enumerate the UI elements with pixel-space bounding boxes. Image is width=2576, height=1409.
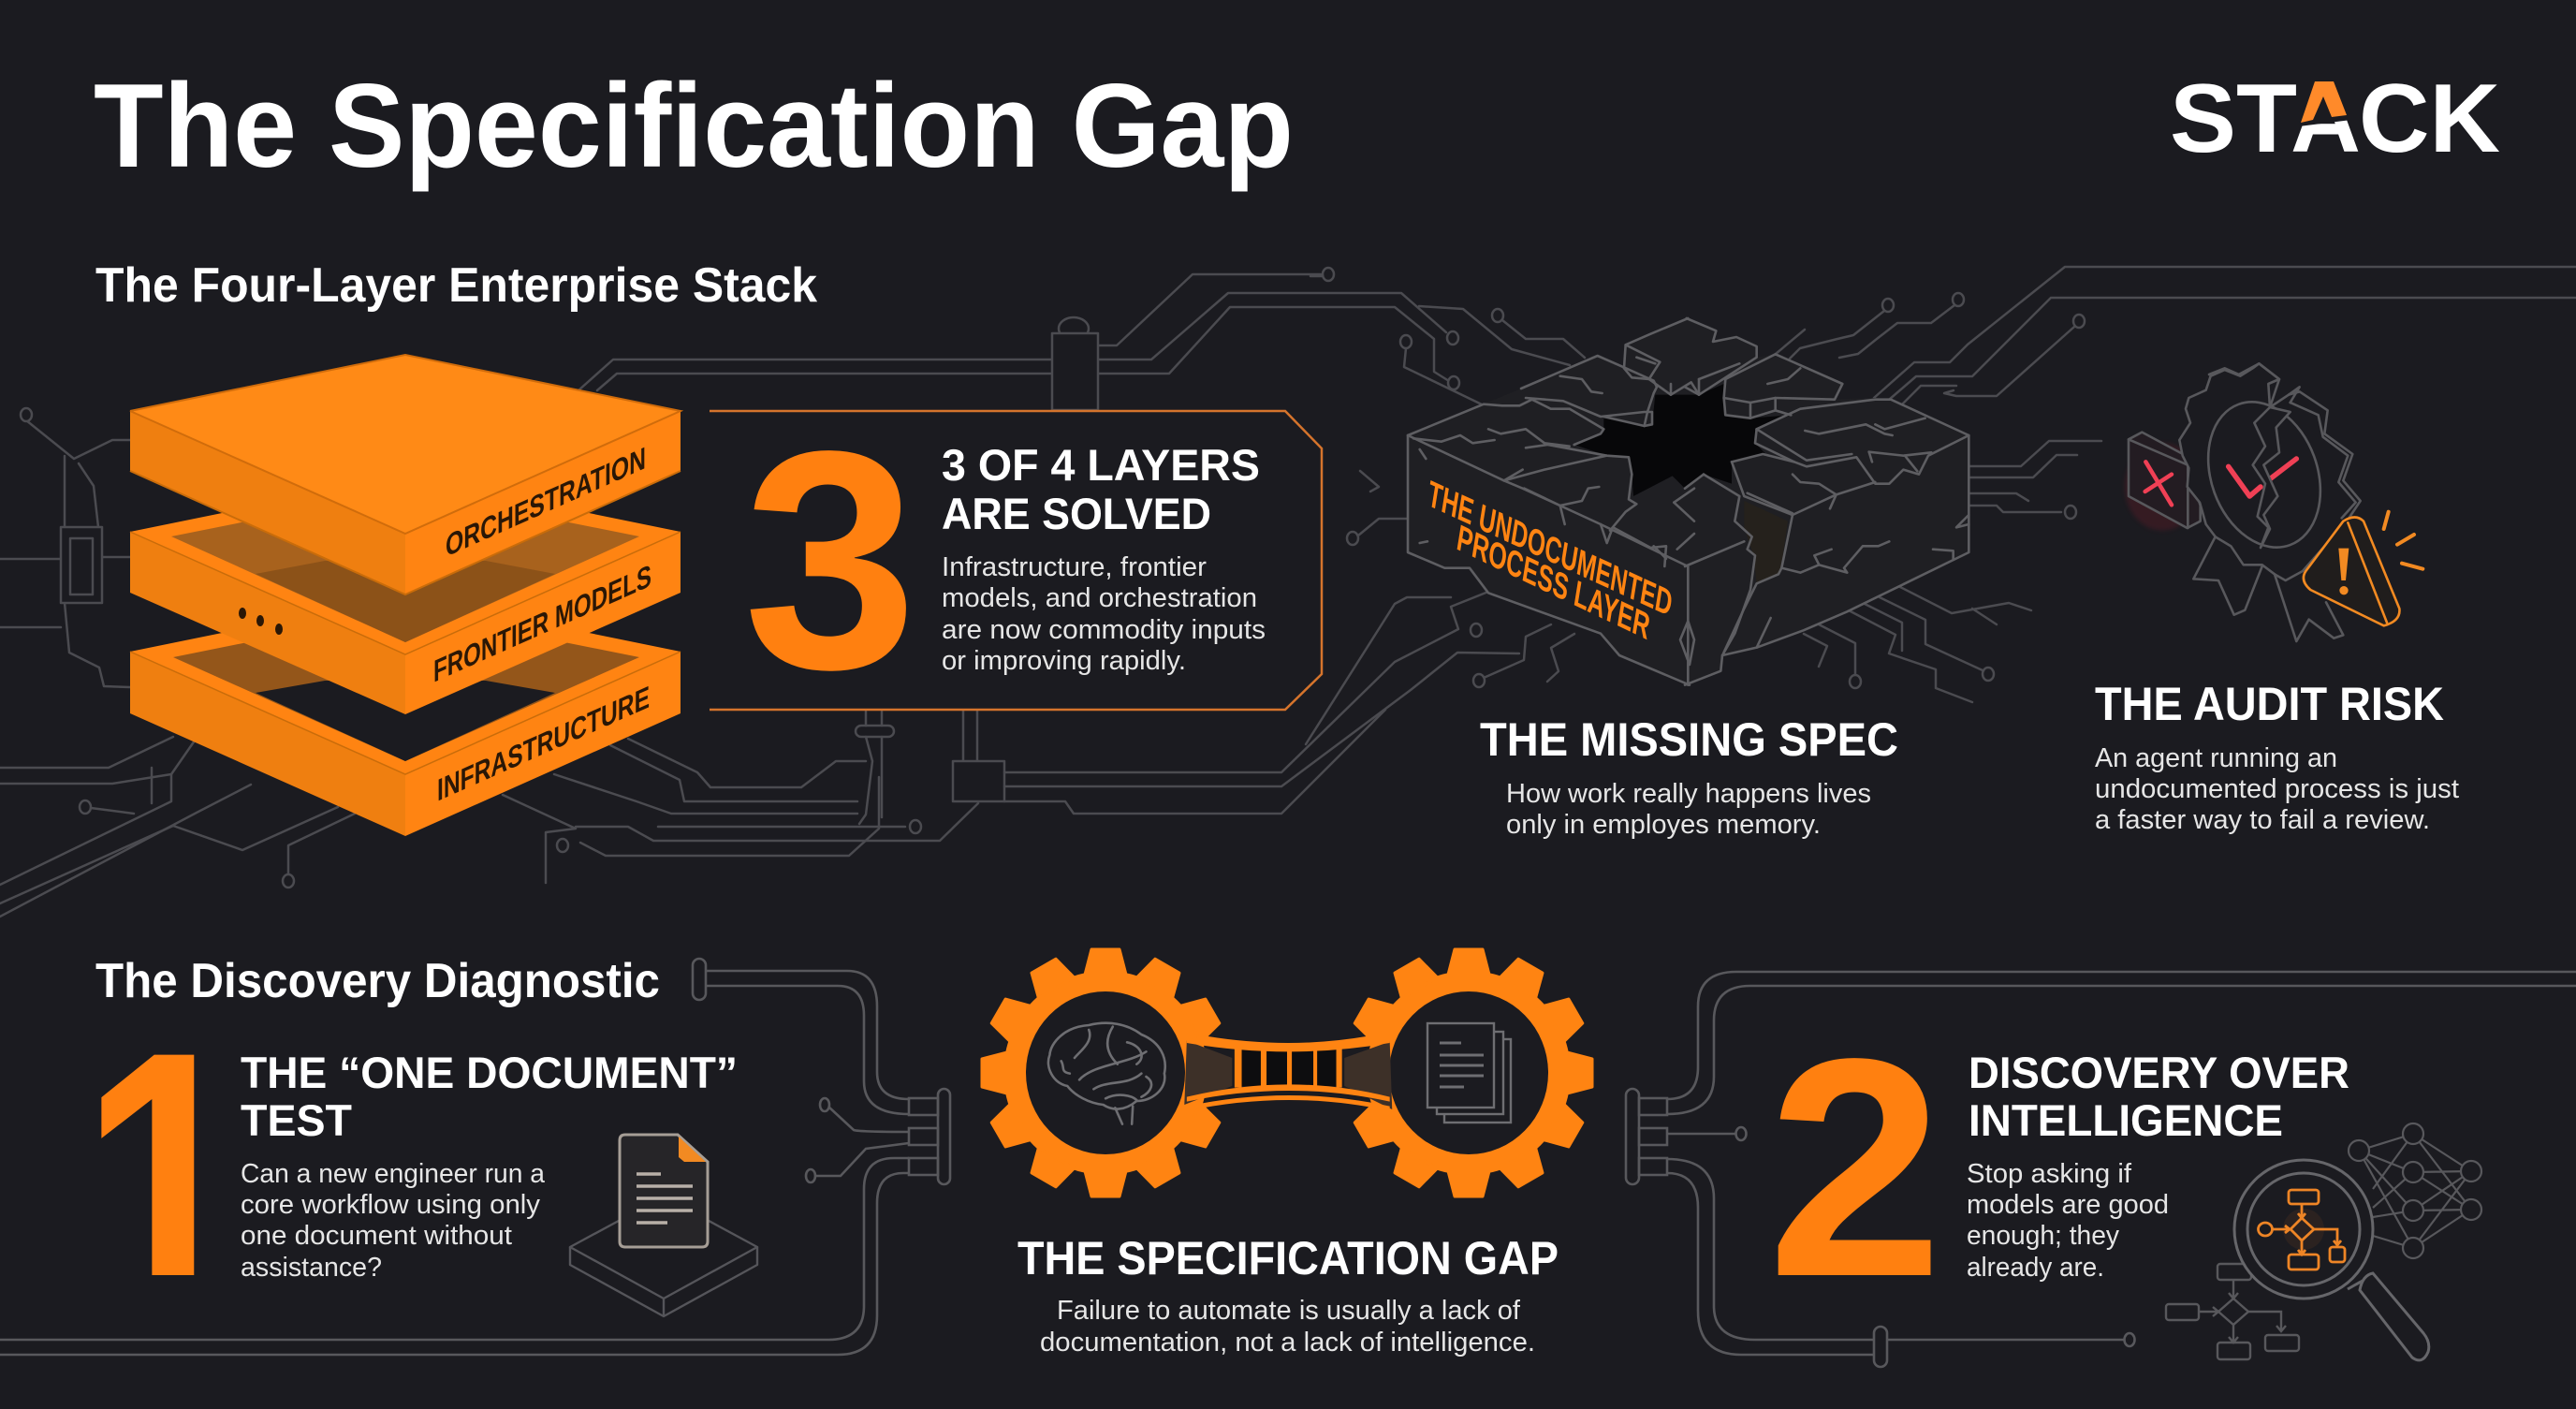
text: the audit risk [2095,678,2459,835]
big number 1: 1 [80,973,251,1398]
text: discovery over intelligence: already are. [1967,1253,2104,1283]
magnifier [2234,1160,2429,1360]
right front chunk [1732,454,1794,462]
text: the missing spec [1480,713,1898,840]
cube face label: PROCESS LAYER [1455,517,1652,648]
text: the specification gap [1017,1232,1559,1358]
logo: STACK: A [2291,65,2361,173]
big number 3: 3 [743,387,917,734]
panel body: are now commodity inputs [942,615,1266,645]
text: one document test [241,1048,738,1283]
top chunk [1624,318,1688,368]
text: discovery over intelligence: Stop asking if [1967,1159,2132,1189]
cracked cube: the undocumented process layer [1408,318,1969,685]
right chunk [1722,400,1969,655]
logo: STACK: CK [2359,65,2500,173]
layer: orchestration: ORCHESTRATION [446,441,646,565]
circuit background: lower pipes [0,959,2576,1367]
left gear [982,949,1222,1196]
icon: stacked documents [1427,1023,1511,1123]
three status dots [239,608,283,635]
heading: The Four-Layer Enterprise Stack: The Four-Layer Enterprise Stack [95,258,817,313]
failed X [2145,462,2172,505]
text: the audit risk: An agent running an [2095,743,2337,773]
neural net [2349,1123,2481,1258]
text: one document test: assistance? [241,1253,382,1283]
text: the specification gap: Failure to automate is usually a lack of [1057,1296,1521,1326]
text: discovery over intelligence [1967,1048,2349,1283]
text: one document test: one document without [241,1221,512,1251]
red glow [2125,443,2200,531]
text: the specification gap: THE SPECIFICATION GAP [1017,1232,1559,1284]
icon: document on platform [570,1135,757,1316]
text: one document test: TEST [241,1095,352,1145]
layer: infrastructure: INFRASTRUCTURE [437,680,650,809]
title: The Specification Gap [94,59,1294,192]
logo: STACK: ST [2170,65,2297,173]
text: the audit risk: THE AUDIT RISK [2095,678,2444,730]
gray flowchart [2166,1264,2299,1359]
big number 2: 2 [1767,994,1943,1342]
icon: magnifier over flowchart and neural net [2166,1123,2481,1360]
text: the missing spec: THE MISSING SPEC [1480,713,1898,766]
layer: infrastructure [130,595,681,836]
text: the audit risk: a faster way to fail a review. [2095,805,2430,835]
text: the audit risk: undocumented process is just [2095,774,2459,804]
heading: The Discovery Diagnostic: The Discovery Diagnostic [95,954,660,1008]
failure card [2129,433,2201,528]
logo: STACK [2173,81,2499,153]
inner wall [1744,501,1788,583]
panel body: models, and orchestration [942,583,1257,613]
broken check mark [2229,459,2296,496]
text: discovery over intelligence: DISCOVERY OVER [1969,1048,2349,1097]
layer: frontier models [130,476,681,714]
icon: cracked audit badge with warning [2125,363,2422,641]
badge outline [2179,363,2361,641]
upper left chunk [1521,356,1657,426]
panel heading: ARE SOLVED [942,489,1211,538]
cube face label: THE UNDOCUMENTED [1426,473,1675,624]
right gear [1352,949,1592,1196]
cube silhouette [1408,318,1969,685]
center chunk [1685,475,1704,489]
cube face label [1426,473,1675,648]
panel heading [942,440,1260,538]
icon: brain [1048,1023,1165,1124]
text: one document test: core workflow using only [241,1190,540,1220]
upper right chunk [1724,354,1842,418]
text: one document test: THE “ONE DOCUMENT” [241,1048,738,1097]
panel body: or improving rapidly. [942,646,1186,676]
isometric stack [130,355,681,836]
circuit background: upper section [0,267,2576,917]
layer: frontier models: FRONTIER MODELS [433,559,651,690]
layer: orchestration [130,355,681,594]
text: the specification gap: documentation, not a lack of intelligence. [1040,1328,1535,1358]
gears: the specification gap [982,949,1592,1196]
panel body [942,552,1266,676]
text: discovery over intelligence: INTELLIGENCE [1969,1095,2283,1145]
left face and chunks [1408,400,1603,445]
text: discovery over intelligence: models are good [1967,1190,2169,1220]
warning triangle [2304,512,2422,625]
crack [2253,407,2291,548]
central hole [1574,384,1791,496]
text: the missing spec: How work really happens lives [1506,779,1871,809]
text: one document test: Can a new engineer run a [241,1159,546,1189]
circuit nodes: upper section [21,268,2085,888]
text: discovery over intelligence: enough; they [1967,1221,2119,1251]
text: the missing spec: only in employes memory. [1506,810,1821,840]
panel heading: 3 OF 4 LAYERS [942,440,1260,490]
orange flowchart in lens [2258,1190,2345,1270]
bridge between gears [1184,1036,1392,1111]
panel: 3 of 4 layers are solved [710,387,1322,734]
panel body: Infrastructure, frontier [942,552,1207,582]
